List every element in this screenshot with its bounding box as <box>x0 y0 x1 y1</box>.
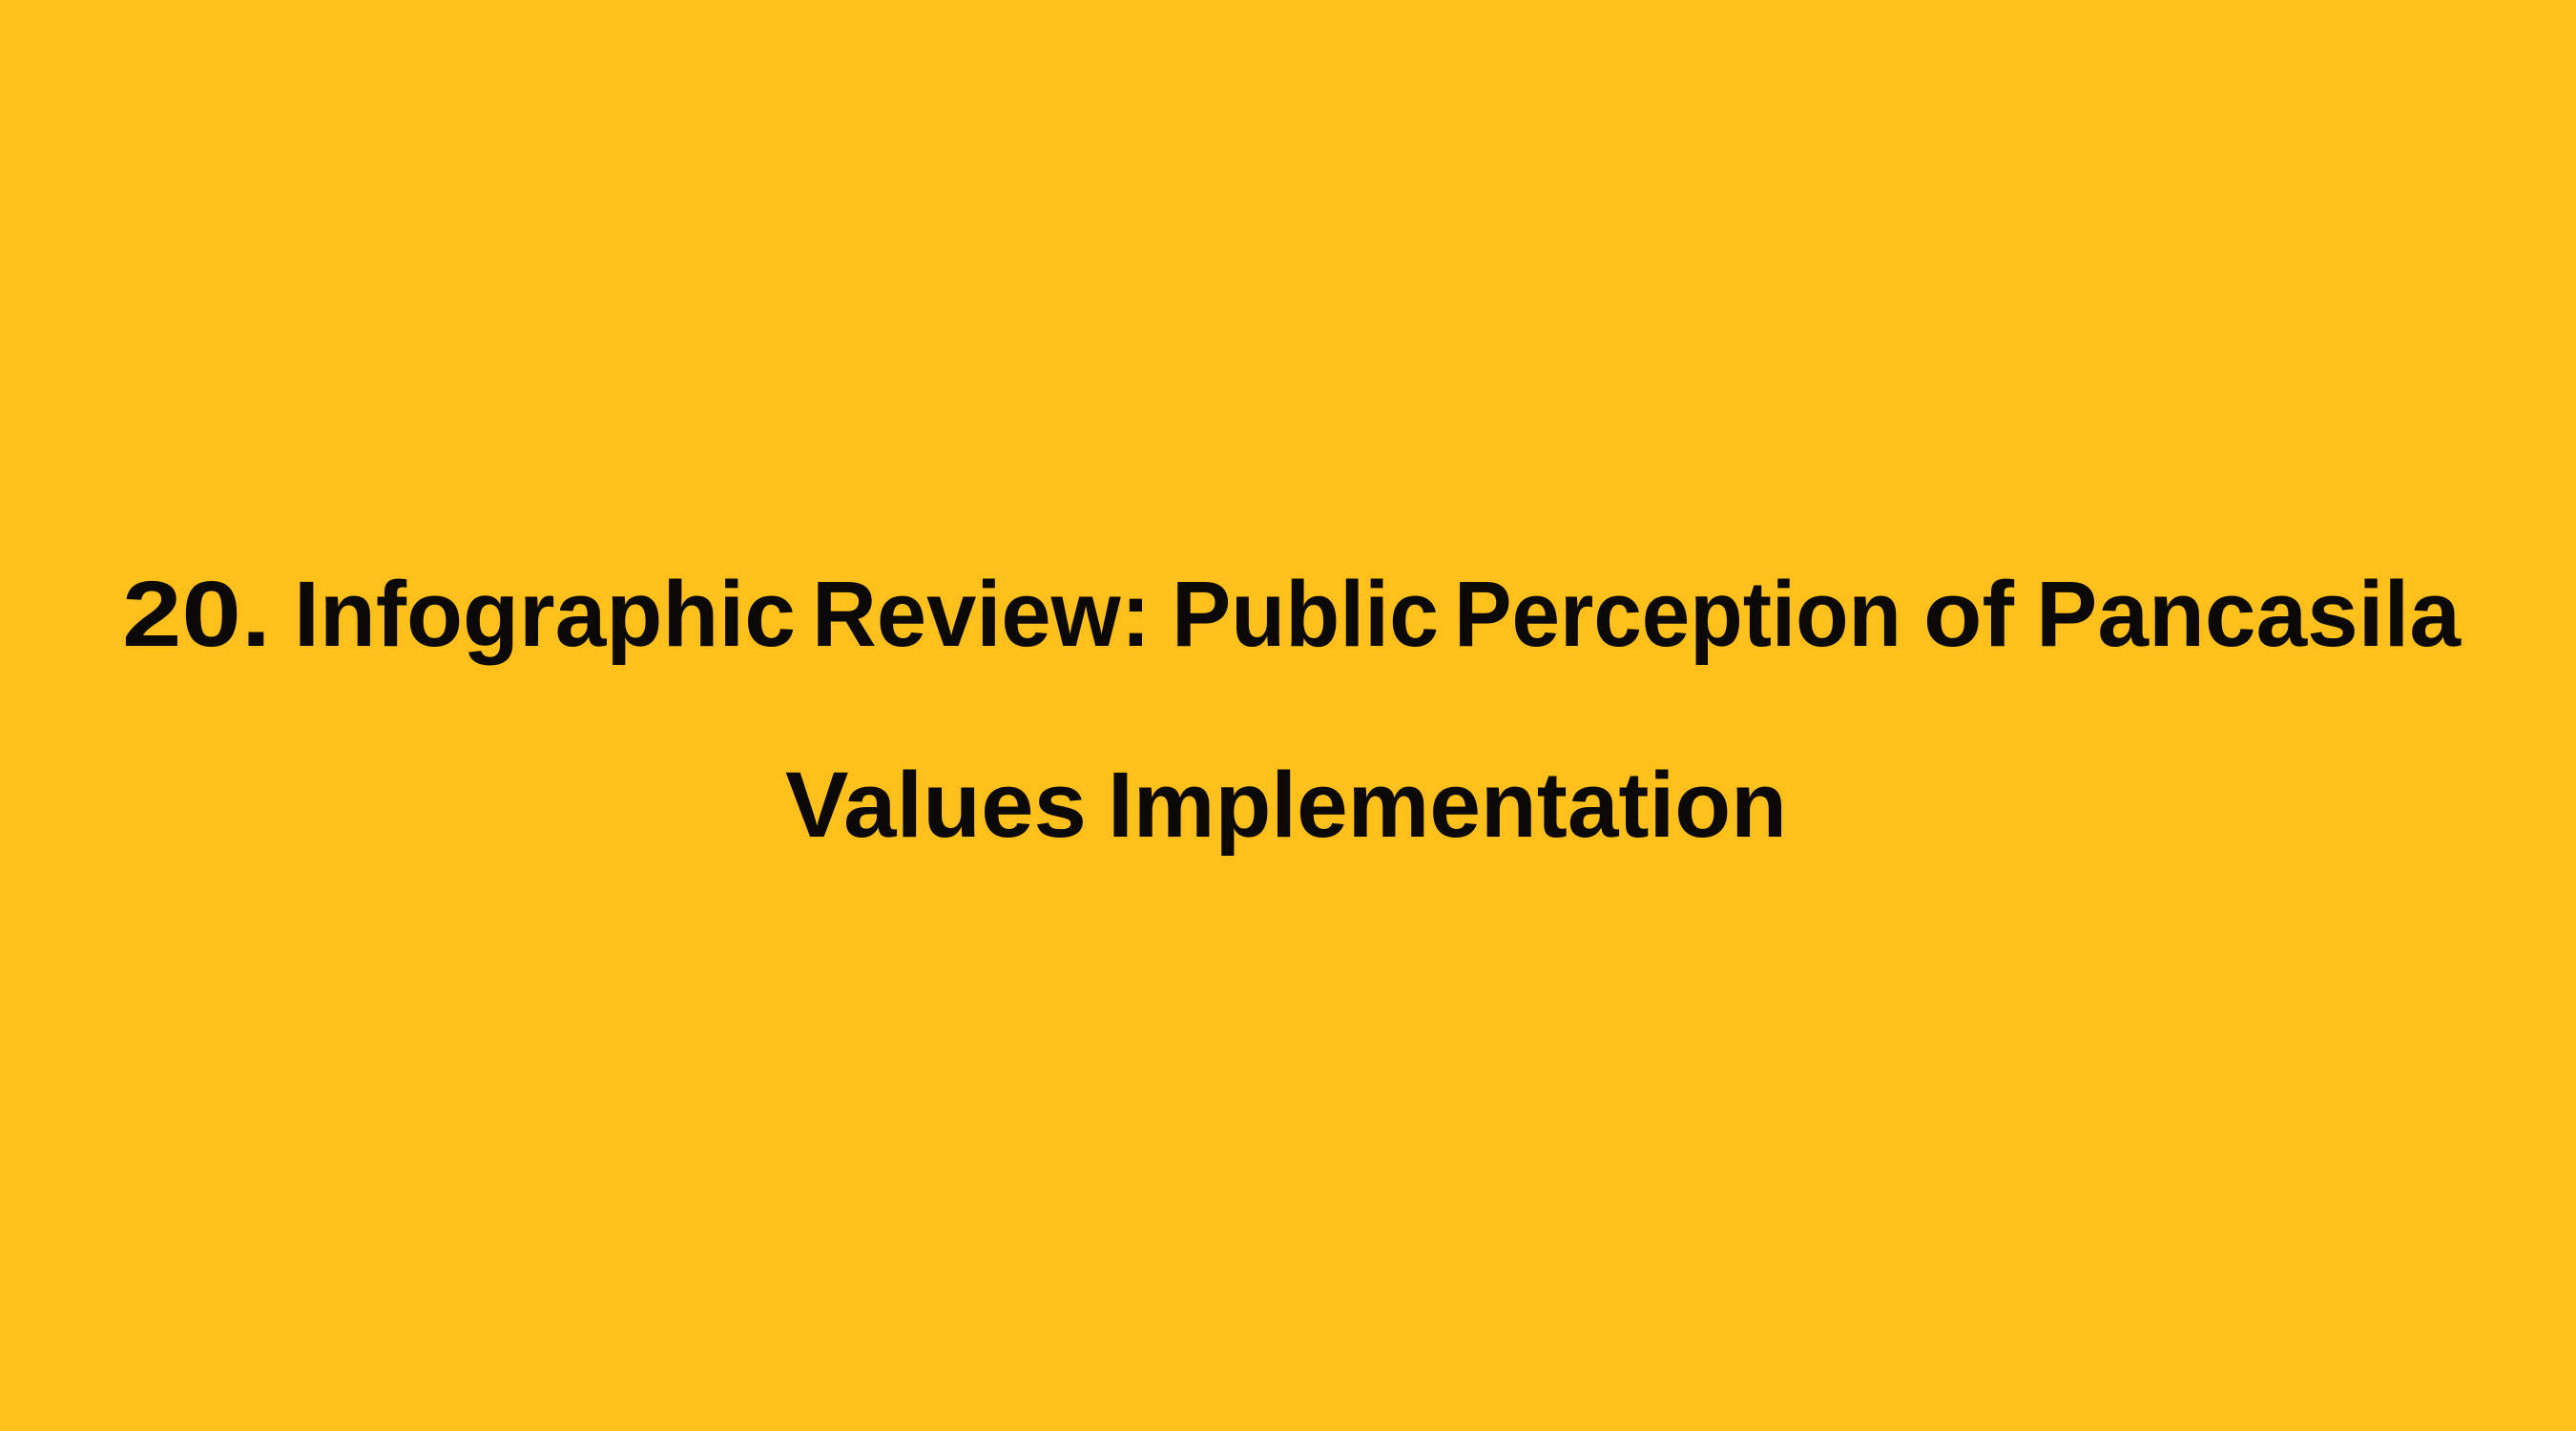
title: 20. <box>122 562 271 666</box>
title: of <box>1923 562 2015 666</box>
title: Public <box>1172 562 1439 666</box>
title: Infographic <box>294 562 796 666</box>
title: Values <box>785 753 1087 857</box>
title: Perception <box>1454 562 1901 666</box>
title: Implementation <box>1108 753 1787 857</box>
title: Review: <box>812 562 1151 666</box>
title: Pancasila <box>2036 562 2462 666</box>
